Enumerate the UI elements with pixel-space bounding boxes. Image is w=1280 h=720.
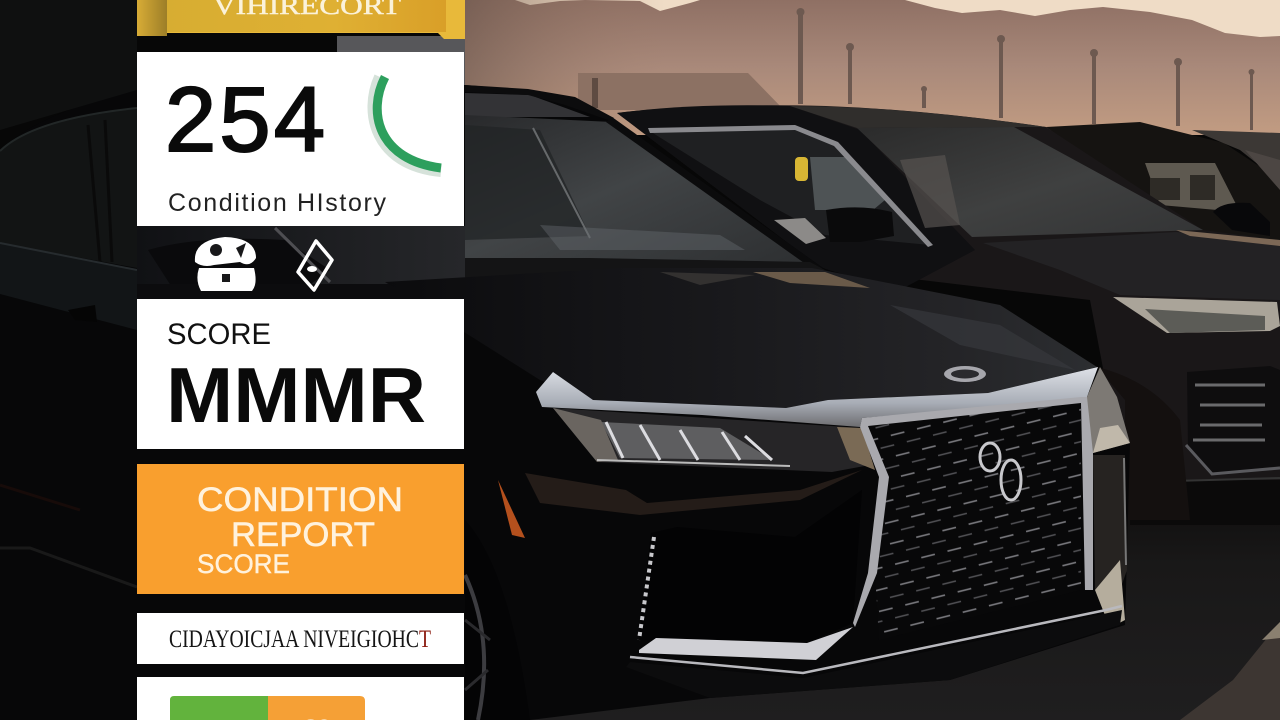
second car mirror [826,207,894,242]
second car headlight [1113,297,1280,333]
panel label: Condition HIstory [168,189,386,217]
panel: MMMR score [137,299,464,449]
A-pillar [606,117,823,270]
mountains and haze [465,0,1280,135]
grille [868,403,1081,640]
pavement [480,480,1280,720]
lower bumper chrome [639,627,853,660]
foglight recess [639,490,862,643]
main windshield [465,115,820,268]
light poles [796,8,1254,130]
car shadow under headlights [1097,367,1190,520]
bar: orange segment [268,696,365,720]
grille chrome frame [853,397,1093,627]
left side window and door [0,80,137,130]
panel: condition history score [137,52,464,226]
headlight [553,408,870,472]
body reflection [525,470,862,515]
sky [465,0,1280,60]
second car, behind [617,105,1280,525]
panel: caption strip [137,613,464,664]
MMMR heading: MMMR [166,351,426,439]
distant building [578,73,784,110]
icon: leaf [298,241,332,290]
foglight strip [639,537,654,640]
panel score label: SCORE [197,549,290,579]
panel heading: CONDITION [197,481,403,519]
second car intake [1187,366,1280,474]
third car, far right [1046,122,1280,262]
panel: condition report score [137,464,464,594]
second car hood [983,232,1280,300]
panel: rating bar [137,677,464,720]
grille emblem [980,443,1021,500]
second car side window [648,127,930,245]
bar: green segment [170,696,268,720]
progress arc [373,77,441,171]
second car windshield [857,127,1203,237]
wheel [465,520,530,720]
banner: report title [137,0,465,39]
right headlight corner [1087,367,1130,453]
panel subheading: REPORT [231,516,375,554]
score number: 254 [165,69,325,171]
chrome headlight brow [536,367,1098,427]
icon: vehicle badge [195,237,256,291]
score label: SCORE [167,318,271,351]
hood [385,268,1097,408]
main car roof [465,93,590,117]
gap behind panels [137,226,465,299]
caption text: CIDAYOICJAA NIVEIGIOHCT [169,626,431,653]
hood emblem [944,366,986,382]
